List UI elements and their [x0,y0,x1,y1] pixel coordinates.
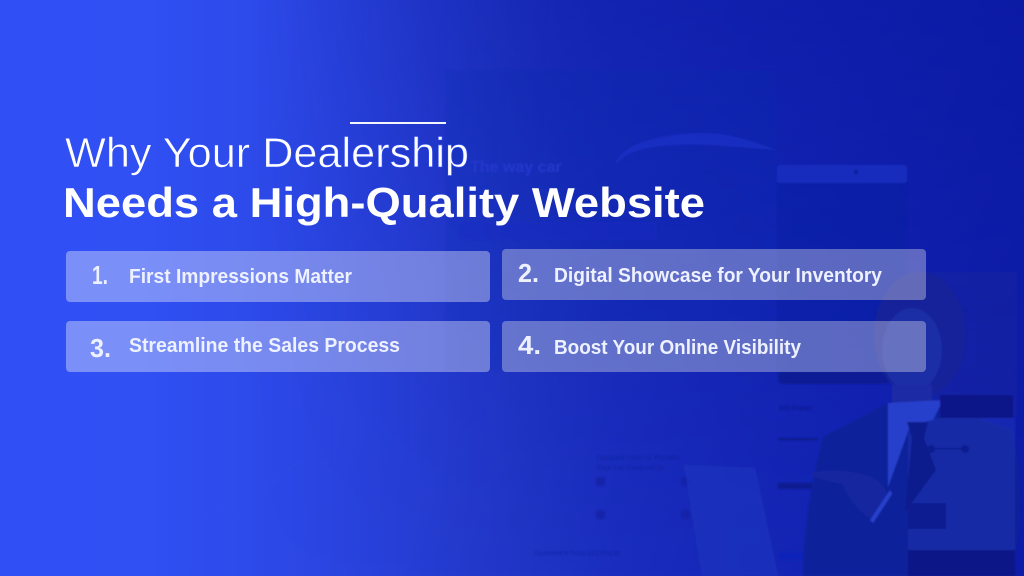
number 2: 2. [518,258,539,288]
head [874,272,966,398]
title [63,129,705,226]
card 1 [66,251,490,302]
tie [905,422,936,512]
decorative dotted wave [100,458,310,576]
mockup text: Your Dream Ride [912,307,968,314]
label 4: Boost Your Online Visibility [554,337,802,359]
cuff [870,490,892,523]
title line one: Why Your Dealership [65,129,469,176]
hero search bar [459,222,657,240]
title line two: Needs a High-Quality Website [63,179,705,226]
number 4: 4. [518,330,541,360]
faded website mockup: features section: Your Car Dealership [596,465,663,472]
features heading: Transmit Gear to Throttle [596,455,680,462]
heading rule [350,122,446,124]
man photo silhouette [684,272,1020,576]
label 2: Digital Showcase for Your Inventory [554,265,883,287]
hero headline: The way car [470,159,562,176]
suit [803,403,1020,576]
shirt [888,400,943,487]
tablet [684,465,778,576]
right page behind the man [907,272,1017,417]
label 3: Streamline the Sales Process [129,335,400,357]
trust line: Customers Trust 10X Faster [534,550,621,557]
card 3 [66,321,490,372]
number 1: 1. [92,260,108,290]
neck [892,385,932,410]
faded website mockup: hero page [445,70,777,370]
number 3: 3. [90,333,111,363]
pointing hand [810,471,888,518]
faded website mockup: second page [777,165,907,560]
page overlaid on the suit [908,418,1015,550]
page image and labels [908,503,946,529]
car outline [615,133,777,165]
faded website mockup: features section [534,455,690,557]
card 4 [502,321,926,372]
label 1: First Impressions Matter [129,266,352,288]
mockup caption: 10X Faster [779,405,812,412]
card 2 [502,249,926,300]
